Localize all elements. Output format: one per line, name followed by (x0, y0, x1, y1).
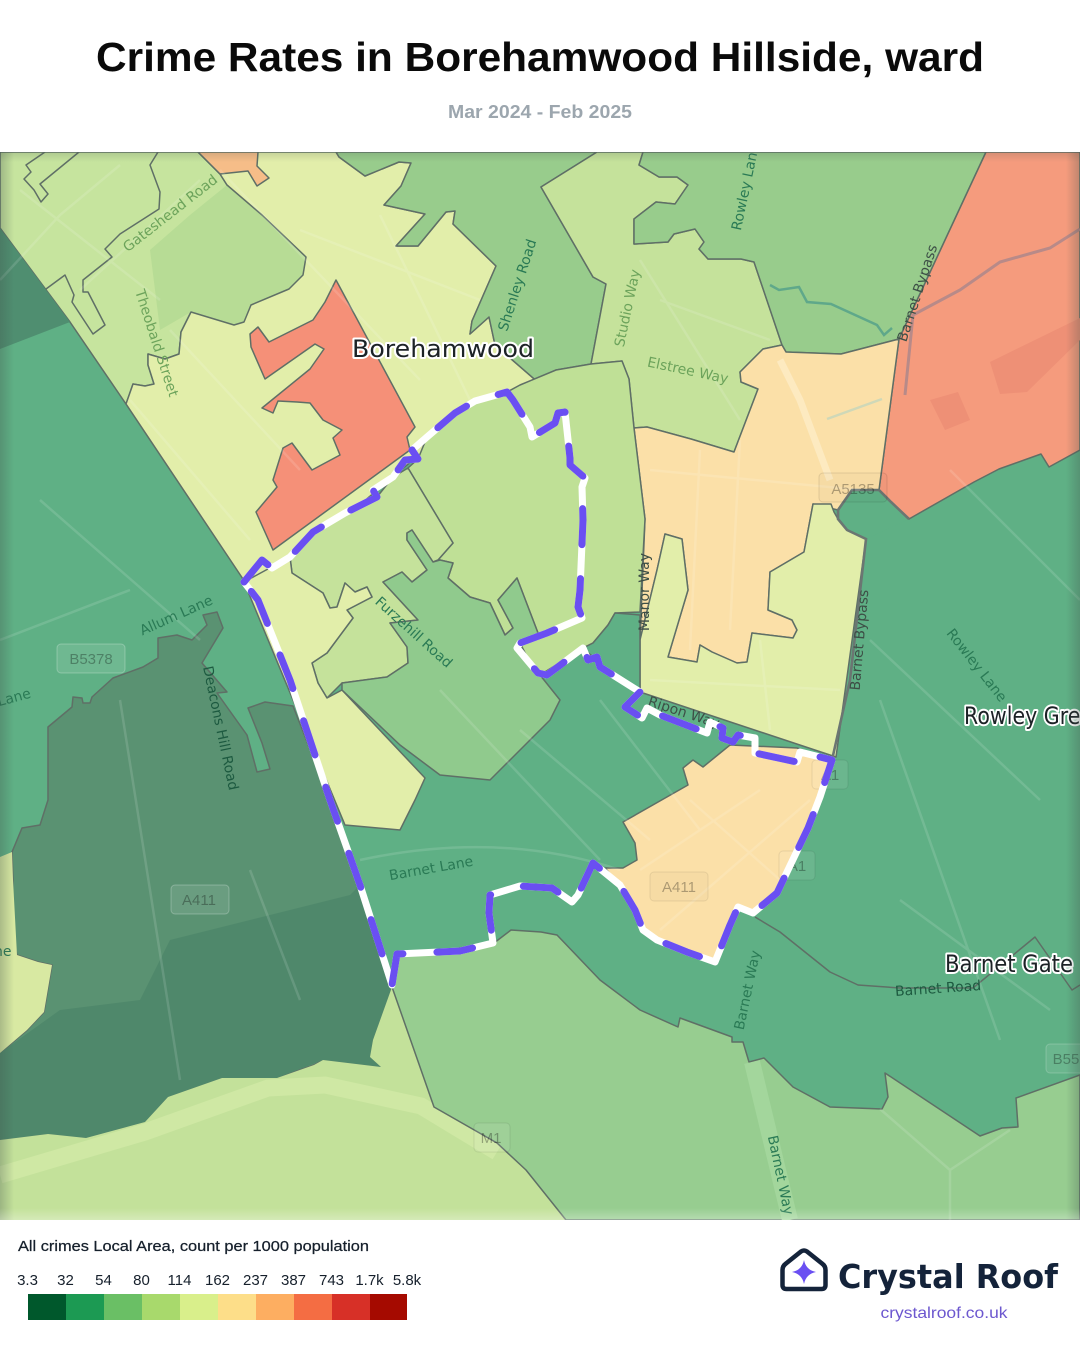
road labels: Elstree Way (646, 355, 730, 387)
road labels: Theobald Street (131, 287, 181, 399)
area: south orange (605, 745, 832, 962)
salmon details: road and fields (905, 229, 1080, 430)
area: left salmon (250, 280, 415, 550)
road labels: Barnet Bypass (848, 589, 872, 691)
place label: Borehamwood: Borehamwood (352, 335, 534, 363)
area: ward north-west green (290, 468, 453, 698)
road labels (0, 142, 1010, 1216)
area: ward north green (408, 361, 645, 675)
road labels: Barnet Bypass (895, 243, 941, 344)
outlines: top-left sub-areas (24, 152, 160, 334)
choropleth map (0, 142, 1080, 1220)
boundary: blob and bypass outline (832, 490, 909, 760)
area: ward east green patch (583, 613, 640, 690)
area: darker patch in top-left (150, 185, 306, 330)
legend tick labels: 114 (168, 1272, 191, 1289)
road labels: Allum Lane (137, 593, 215, 639)
area: ward central green (342, 530, 560, 780)
area: ward south-west yellow (244, 557, 425, 830)
legend tick labels: 5.8k (393, 1272, 422, 1289)
shields: road number labels: A5135 (831, 481, 875, 498)
road labels: Rowley Lane (943, 626, 1010, 705)
road: Barnet Way strip (752, 1062, 790, 1220)
title: Crime Rates in Borehamwood Hillside, ward (96, 34, 984, 80)
legend tick labels: 387 (281, 1272, 306, 1289)
legend colour swatches (28, 1294, 407, 1320)
area: orange patch at top (198, 152, 269, 186)
legend title: All crimes Local Area, count per 1000 population (18, 1238, 369, 1255)
area: central yellow-green (126, 152, 540, 582)
legend tick labels: 54 (95, 1272, 112, 1289)
area: bottom-centre green (392, 930, 1080, 1220)
shields: road number labels: A411 (182, 892, 216, 909)
shields: road number labels (57, 473, 1080, 1152)
area: top-left light green (0, 152, 226, 404)
wordmark: Crystal Roof (838, 1257, 1059, 1296)
area: north-east yellow-green (640, 504, 866, 757)
area: north orange (634, 339, 899, 663)
icon: house with star (782, 1250, 826, 1289)
subtitle: date range: Mar 2024 - Feb 2025 (448, 102, 632, 122)
road: Barnet Road line (755, 917, 1080, 990)
road labels: Rowley Lane (729, 142, 763, 232)
legend tick labels: 162 (205, 1272, 230, 1289)
legend tick labels: 32 (57, 1272, 74, 1289)
legend tick labels: 3.3 (17, 1272, 38, 1289)
area: far-left yellow-green (0, 852, 52, 1053)
road labels: Deacons Hill Road (199, 665, 241, 792)
roads: faint street network (0, 165, 1080, 1220)
shields: road number labels: B5378 (69, 651, 113, 668)
area: bottom-left light green (0, 987, 566, 1220)
map edge fade (0, 152, 1080, 1220)
road: grey road in north orange (827, 399, 882, 419)
area: top-right green (634, 152, 986, 354)
area: right salmon (879, 152, 1080, 519)
road labels: Studio Way (612, 268, 644, 348)
shields: road number labels: B55 (1053, 1051, 1079, 1068)
ward boundary: Borehamwood Hillside (244, 392, 832, 985)
area: dark teal corner (0, 228, 70, 349)
river: stream in top-right (770, 285, 892, 335)
area: bottom-left dark (0, 612, 392, 1140)
road: pale main road in north orange (780, 360, 830, 480)
logo: Crystal Roof (782, 1250, 1059, 1322)
legend tick labels: 237 (243, 1272, 268, 1289)
area: upper green (336, 152, 606, 384)
road labels: Manor Way (637, 553, 653, 631)
shields: road number labels: A411 (662, 879, 696, 896)
area: north-centre light green (541, 152, 782, 452)
shields: road number labels: M1 (481, 1130, 501, 1147)
road labels: Gateshead Road (120, 172, 221, 256)
website link: crystalroof.co.uk (880, 1305, 1009, 1322)
legend scale (17, 1272, 422, 1320)
road labels: Ripon Way (646, 694, 721, 732)
road labels: Furzehill Road (372, 594, 455, 671)
area: darker woodland in dark zone (0, 885, 392, 1140)
legend tick labels: 1.7k (355, 1272, 384, 1289)
road labels: Shenley Road (496, 237, 540, 333)
road: M1 motorway strip (0, 1085, 497, 1175)
legend tick labels (17, 1272, 422, 1289)
road labels: Barnet Road (894, 978, 982, 1000)
area: green blob by bypass (838, 490, 909, 539)
road labels: Barnet Way (732, 949, 764, 1031)
road labels: Barnet Way (764, 1134, 796, 1216)
shields: road number labels: A1 (821, 767, 839, 784)
legend tick labels: 743 (319, 1272, 344, 1289)
road labels: Barnet Lane (388, 854, 474, 884)
shields: road number labels: A1 (788, 858, 806, 875)
legend tick labels: 80 (133, 1272, 150, 1289)
